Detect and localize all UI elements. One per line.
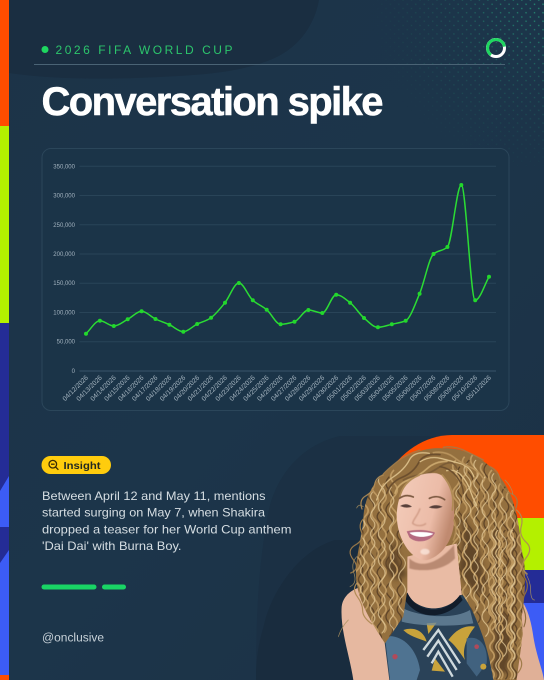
chart x axis labels: 04/17/2026 [131, 374, 160, 403]
chart x axis labels: 05/04/2026 [367, 374, 396, 403]
chart x axis labels: 04/29/2026 [298, 374, 326, 403]
chart data points [84, 183, 491, 336]
chart y axis labels: 150,000 [53, 281, 76, 287]
background shape: top dark blob [9, 0, 319, 79]
hair mass [350, 443, 530, 680]
insight body text: dropped a teaser for her World Cup anthem [42, 522, 292, 536]
dark curls [358, 460, 525, 679]
background shape: halftone dots [394, 0, 544, 153]
chart x axis labels: 04/30/2026 [312, 374, 340, 403]
chart y axis labels: 200,000 [53, 252, 76, 258]
hair behind neck [400, 543, 467, 603]
crown waves [377, 452, 484, 505]
title: Conversation spike [42, 80, 384, 124]
insight body text: 'Dai Dai' with Burna Boy. [42, 539, 182, 553]
chin highlight [420, 549, 430, 555]
chart y axis labels: 250,000 [53, 223, 76, 229]
chart x axis labels: 04/24/2026 [228, 374, 257, 403]
hair shadows [386, 510, 509, 673]
hair edge curls [350, 447, 530, 673]
accent bars [42, 584, 126, 590]
chart x axis labels: 04/15/2026 [103, 374, 132, 403]
chart x axis labels: 05/03/2026 [354, 374, 382, 403]
panel: line chart [42, 148, 509, 410]
chart x axis labels: 04/18/2026 [145, 374, 174, 403]
chart x axis labels: 04/19/2026 [159, 374, 187, 403]
chart x axis labels: 05/01/2026 [326, 374, 354, 403]
chart x axis labels: 04/22/2026 [201, 374, 229, 403]
chart x axis labels: 04/16/2026 [117, 374, 146, 403]
chart x axis labels: 04/28/2026 [284, 374, 313, 403]
background shape: bottom blob dark [256, 540, 544, 680]
chart x axis labels: 05/07/2026 [409, 374, 438, 403]
eyebrows [399, 496, 445, 500]
chart line [86, 185, 489, 334]
chart y axis labels: 0 [72, 369, 76, 375]
mouth [407, 530, 435, 541]
chart x axis labels: 05/10/2026 [451, 374, 479, 403]
chart y axis labels [53, 164, 76, 375]
under-chin shadow [409, 545, 455, 570]
chart x axis labels: 04/25/2026 [242, 374, 271, 403]
chart x axis labels: 04/13/2026 [76, 374, 104, 403]
hair flyaways [338, 480, 535, 637]
right arm [505, 590, 544, 680]
chart y axis labels: 100,000 [53, 310, 76, 316]
chart x axis labels: 04/26/2026 [256, 374, 285, 403]
colour panel behind portrait [385, 435, 544, 680]
chart x axis labels: 05/06/2026 [395, 374, 424, 403]
handle: @onclusive [42, 632, 104, 644]
insight badge: Insight [64, 460, 101, 472]
icon: progress ring [488, 40, 504, 56]
chart x axis labels [62, 374, 493, 403]
insight body text: started surging on May 7, when Shakira [42, 506, 265, 520]
fringe strands [399, 475, 456, 540]
mid curls [354, 453, 521, 679]
header label: 2026 FIFA WORLD CUP [56, 43, 232, 57]
eyes [400, 504, 443, 509]
insight badge [42, 456, 111, 474]
left colour stripe [0, 0, 9, 680]
chart y axis labels: 50,000 [57, 340, 76, 346]
background shape: bottom blob light [256, 436, 544, 680]
header rule [34, 64, 505, 66]
neck and chest [406, 543, 463, 608]
chart x axis labels: 05/05/2026 [381, 374, 410, 403]
chart x axis labels: 04/21/2026 [187, 374, 215, 403]
chart x axis labels: 05/02/2026 [340, 374, 368, 403]
insight body text [42, 489, 292, 553]
portrait: smiling woman with curly hair [338, 443, 544, 680]
light curls [360, 460, 515, 679]
icon: magnifier [49, 460, 58, 470]
chart y axis labels: 350,000 [53, 164, 76, 170]
chart x axis labels: 04/27/2026 [270, 374, 299, 403]
chart gridlines [80, 166, 496, 371]
chart y axis labels: 300,000 [53, 194, 76, 200]
chart x axis labels: 05/09/2026 [437, 374, 465, 403]
chart x axis labels: 04/23/2026 [215, 374, 243, 403]
chart x axis labels: 04/14/2026 [89, 374, 118, 403]
chart x axis labels: 05/11/2026 [465, 374, 493, 402]
sequined top [383, 593, 503, 680]
insight body text: Between April 12 and May 11, mentions [42, 489, 266, 503]
face [397, 473, 454, 560]
chart x axis labels: 04/12/2026 [62, 374, 90, 403]
chart x axis labels: 05/08/2026 [423, 374, 452, 403]
nose [413, 508, 426, 526]
left arm [341, 587, 391, 680]
chart x axis labels: 04/20/2026 [173, 374, 201, 403]
